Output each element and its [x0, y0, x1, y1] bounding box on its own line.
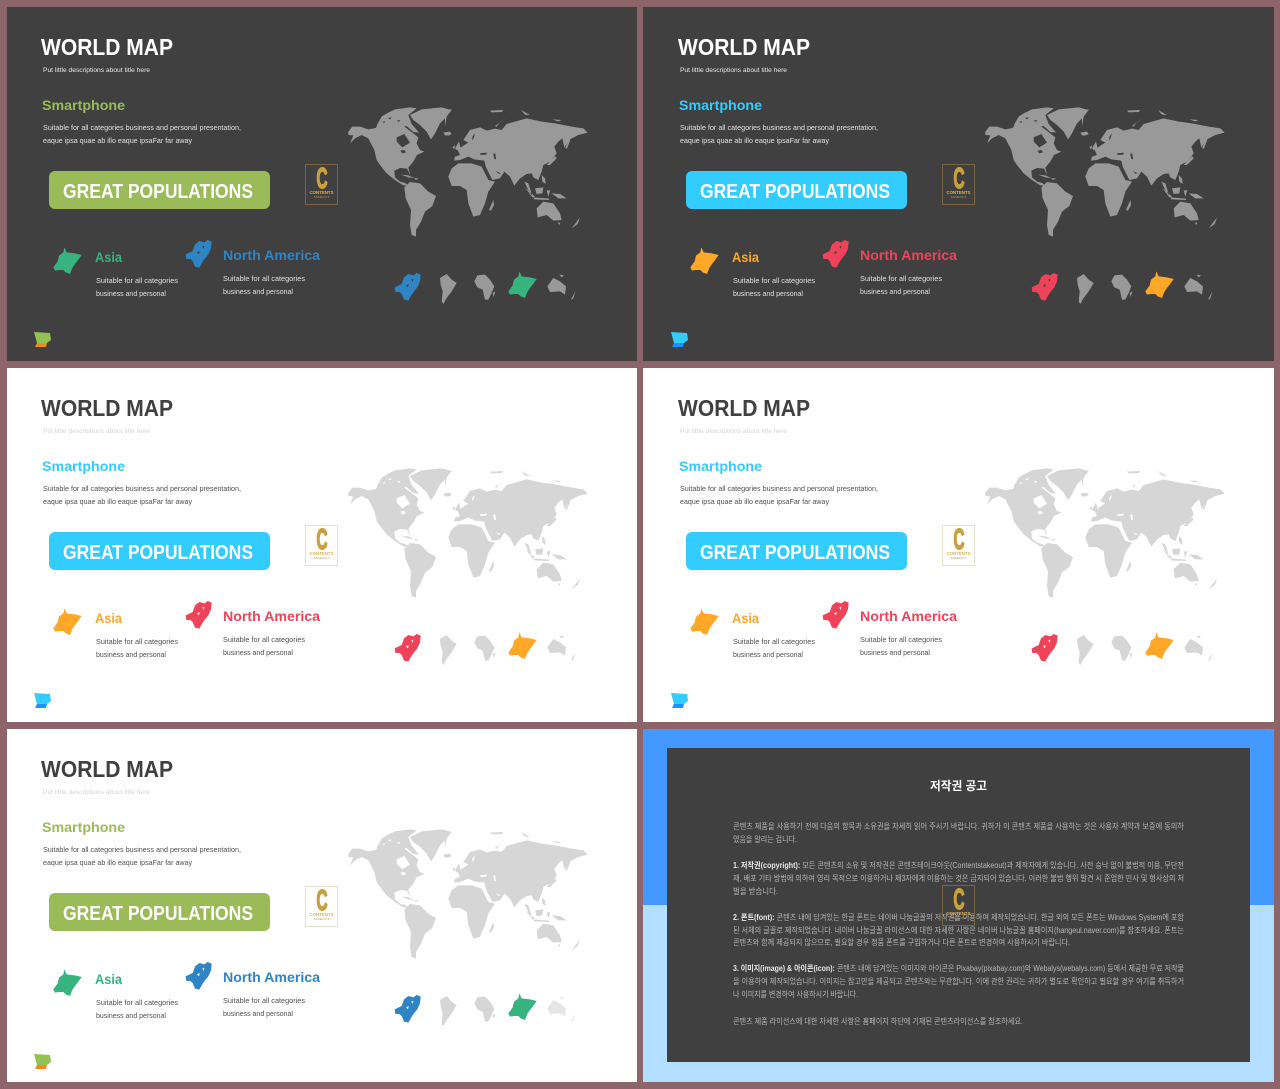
logo: C: [316, 524, 328, 556]
text block: Smartphone description: eaque ipsa quae ab illo eaque ipsaFar far away: [43, 858, 192, 867]
text block: Smartphone description: eaque ipsa quae ab illo eaque ipsaFar far away: [43, 497, 192, 506]
logo: [306, 163, 338, 204]
logo: CONTENTS: [310, 912, 334, 917]
label: North America: North America: [223, 247, 320, 263]
text block: copyright: 벌을 받습니다.: [733, 886, 778, 896]
button: great populations: [686, 532, 907, 570]
text block: Asia description: Suitable for all categories: [96, 276, 178, 285]
button: great populations: [49, 893, 270, 931]
panel: white slide cyan right: [643, 368, 1274, 722]
heading: Smartphone: Smartphone: [42, 819, 125, 835]
text block: Asia description: business and personal: [733, 289, 803, 298]
label: Asia: Asia: [95, 249, 122, 265]
logo: C: [316, 885, 328, 917]
heading: copyright notice: 저작권 공고: [930, 778, 987, 793]
icon: Asia: [690, 608, 719, 635]
continent icon row: [395, 632, 575, 665]
world map: [985, 107, 1225, 237]
continent icon row: [395, 993, 575, 1026]
text block: North America description: Suitable for all categories: [860, 274, 942, 283]
text block: North America description: business and personal: [860, 648, 930, 657]
text block: intro: 였음을 알리는 겁니다.: [733, 834, 797, 844]
label: North America: North America: [223, 608, 320, 624]
text block: North America description: Suitable for all categories: [860, 635, 942, 644]
button: great populations: GREAT POPULATIONS: [63, 181, 253, 203]
text block: Smartphone description: eaque ipsa quae ab illo eaque ipsaFar far away: [43, 136, 192, 145]
button: great populations: [49, 532, 270, 570]
logo: C: [954, 524, 965, 556]
icon: North America: [186, 962, 212, 990]
title: WORLD MAP: [678, 34, 810, 60]
continent icon row: [1032, 271, 1212, 304]
subtitle: Put little descriptions about title here: [43, 790, 151, 796]
text block: North America description: Suitable for all categories: [223, 274, 305, 283]
text block: Asia description: Suitable for all categories: [96, 637, 178, 646]
logo: [306, 885, 338, 926]
text block: copyright: 재, 배포 기타 방법에 의하여 영리 목적으로 이용하거나 제3자에게 이용하는 것은 금지되어 있습니다. 이러한 불법 행위 발견 시 준엄한 민사 및 형사상의 처: [733, 873, 1184, 883]
title: WORLD MAP: [41, 34, 173, 60]
heading: Smartphone: Smartphone: [42, 458, 125, 474]
icon: Asia: [690, 247, 719, 274]
button: great populations: GREAT POPULATIONS: [700, 181, 890, 203]
text block: font: 2. 폰트(font): 콘텐츠 내에 담겨있는 한글 폰트는 네이버 나눔글꼴의 저작권을 이용하여 제작되었습니다. 한글 외의 모든 폰트는 Windows System에 포함: [733, 913, 1234, 922]
panel: white slide green: [7, 729, 637, 1082]
text block: Smartphone description: Suitable for all categories business and personal presentation,: [680, 484, 878, 493]
label: North America: North America: [223, 969, 320, 985]
icon: Asia: [53, 608, 82, 635]
button: great populations: [686, 171, 907, 209]
text block: Smartphone description: Suitable for all categories business and personal presentation,: [43, 123, 241, 132]
text block: Asia description: business and personal: [96, 650, 166, 659]
button: great populations: [49, 171, 270, 209]
logo: [942, 163, 974, 204]
button: great populations: GREAT POPULATIONS: [63, 903, 253, 925]
text block: North America description: Suitable for all categories: [223, 996, 305, 1005]
text block: image and icon: 3. 이미지(image) & 아이콘(icon): 콘텐츠 내에 담겨있는 이미지와 아이콘은 Pixabay(pixabay.com)와 Webalys(webalys.com) 등에서 제공한 무료 저작물: [733, 964, 1233, 973]
text block: intro: 콘텐츠 제품을 사용하기 전에 다음의 항목과 소유권을 자세히 읽어 주시기 바랍니다. 귀하가 이 콘텐츠 제품을 사용하는 것은 사용자 계약과 보증에 동의하: [733, 821, 1185, 831]
continent icon row: [395, 271, 575, 304]
continent icon row: [1032, 632, 1212, 665]
subtitle: Put little descriptions about title here: [43, 68, 151, 74]
heading: Smartphone: Smartphone: [679, 97, 762, 113]
text block: North America description: business and personal: [860, 287, 930, 296]
logo: TAKEOUT: [314, 917, 330, 921]
label: Asia: Asia: [95, 610, 122, 626]
world map: [348, 107, 588, 237]
title: WORLD MAP: [41, 395, 173, 421]
button: great populations: GREAT POPULATIONS: [700, 542, 890, 564]
text block: license note: 콘텐츠 제품 라이선스에 대한 자세한 사항은 홈페이지 하단에 기재된 콘텐츠라이선스를 참조하세요.: [733, 1016, 1023, 1026]
text block: Asia description: business and personal: [733, 650, 803, 659]
text block: North America description: business and personal: [223, 1009, 293, 1018]
text block: Asia description: business and personal: [96, 1011, 166, 1020]
icon: corner mark: [671, 693, 688, 708]
world map: [985, 468, 1225, 598]
panel: copyright notice: [643, 729, 1274, 1082]
icon: corner mark: [34, 693, 51, 708]
logo: [942, 524, 974, 566]
text block: Asia description: business and personal: [96, 289, 166, 298]
panel: white slide cyan left: [7, 368, 637, 722]
text block: font: 콘텐츠와 함께 제공되지 않으므로, 필요할 경우 정품 폰트를 구입하거나 다른 폰트로 변경하여 사용하시기 바랍니다.: [733, 937, 1070, 947]
text block: Smartphone description: Suitable for all categories business and personal presentation,: [43, 484, 241, 493]
label: Asia: Asia: [732, 610, 759, 626]
icon: corner mark: [671, 332, 688, 347]
logo: TAKEOUT: [950, 556, 967, 560]
icon: North America: [186, 240, 212, 268]
icon: North America: [823, 601, 849, 629]
subtitle: Put little descriptions about title here: [680, 429, 788, 435]
icon: Asia: [53, 247, 82, 274]
text block: North America description: business and personal: [223, 648, 293, 657]
icon: Asia: [53, 969, 82, 996]
icon: corner mark: [34, 1054, 51, 1069]
logo: C: [954, 163, 965, 195]
icon: corner mark: [34, 332, 51, 347]
logo: TAKEOUT: [950, 195, 967, 199]
text block: copyright: 1. 저작권(copyright): 모든 콘텐츠의 소유 및 저작권은 콘텐츠테이크아웃(Contentstakeout)과 제작자에게 있습니다. 사전 승낙 없이 불법적 이용, 무단전: [733, 861, 1231, 870]
text block: North America description: business and personal: [223, 287, 293, 296]
logo: CONTENTS: [946, 911, 970, 916]
heading: Smartphone: Smartphone: [42, 97, 125, 113]
button: great populations: GREAT POPULATIONS: [63, 542, 253, 564]
logo: CONTENTS: [310, 551, 334, 556]
text block: Asia description: Suitable for all categories: [96, 998, 178, 1007]
text block: Smartphone description: eaque ipsa quae ab illo eaque ipsaFar far away: [680, 136, 829, 145]
logo: C: [316, 163, 328, 195]
label: Asia: Asia: [95, 971, 122, 987]
panel: dark slide green: [7, 7, 637, 361]
text block: image and icon: 나 이미지를 변경하여 사용하시기 바랍니다.: [733, 989, 858, 999]
icon: North America: [186, 601, 212, 629]
subtitle: Put little descriptions about title here: [43, 429, 151, 435]
logo: CONTENTS: [310, 190, 334, 195]
logo: TAKEOUT: [950, 916, 967, 920]
logo: [942, 884, 974, 926]
panel: dark slide cyan: [643, 7, 1274, 361]
logo: C: [954, 884, 965, 916]
logo: TAKEOUT: [314, 556, 330, 560]
subtitle: Put little descriptions about title here: [680, 68, 788, 74]
text block: Smartphone description: Suitable for all categories business and personal presentation,: [43, 845, 241, 854]
world map: [348, 468, 588, 598]
text block: North America description: Suitable for all categories: [223, 635, 305, 644]
title: WORLD MAP: [678, 395, 810, 421]
text block: Smartphone description: eaque ipsa quae ab illo eaque ipsaFar far away: [680, 497, 829, 506]
world map: [348, 829, 588, 959]
text block: Asia description: Suitable for all categories: [733, 637, 815, 646]
text block: font: 된 서체의 글꼴로 제작되었습니다. 네이버 나눔글꼴 라이선스에 대한 자세한 사항은 네이버 나눔글꼴 홈페이지(hangeul.naver.com)를 참조하세요. 폰트는: [733, 925, 1184, 935]
logo: TAKEOUT: [314, 195, 330, 199]
text block: image and icon: 을 이용하여 제작되었습니다. 이미지는 참고만을 제공되고 콘텐츠와는 무관합니다. 이에 관한 권리는 귀하가 별도로 확인하고 필요할 경우 여기를 취득하거: [733, 976, 1184, 986]
heading: Smartphone: Smartphone: [679, 458, 762, 474]
logo: CONTENTS: [946, 551, 970, 556]
icon: North America: [823, 240, 849, 268]
label: North America: North America: [860, 247, 957, 263]
label: Asia: Asia: [732, 249, 759, 265]
title: WORLD MAP: [41, 756, 173, 782]
text block: Smartphone description: Suitable for all categories business and personal presentation,: [680, 123, 878, 132]
text block: Asia description: Suitable for all categories: [733, 276, 815, 285]
logo: [306, 524, 338, 566]
label: North America: North America: [860, 608, 957, 624]
logo: CONTENTS: [946, 190, 970, 195]
